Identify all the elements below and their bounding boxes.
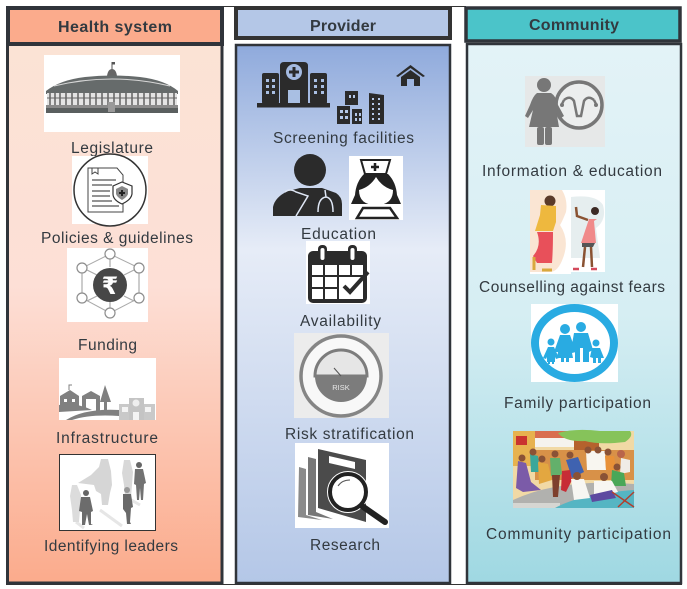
icon: infrastructure [59,358,156,420]
label: research: Research [310,537,380,554]
heading: provider [236,8,450,38]
heading: health system: Health system [58,19,172,36]
panel: community [466,8,681,583]
label: funding: Funding [78,337,137,354]
icon: doctor [273,154,342,216]
icon: parliament building [44,55,180,132]
heading: community: Community [529,17,619,34]
label: legislature: Legislature [71,140,153,157]
icon: counselling figures [530,190,605,274]
icon: rupee network [67,248,148,322]
heading: health system [8,8,222,44]
label: counselling against fears: Counselling against fears [479,279,665,296]
icon: identifying leaders [60,454,156,530]
icon: policy document [72,154,148,226]
icon: calendar [306,241,370,304]
label: community participation: Community participation [486,526,671,543]
icon: family in ring [531,304,618,382]
panel: provider [236,8,450,583]
icon: nurse [349,156,403,220]
label: education: Education [301,226,376,243]
illustration: community gathering [513,430,634,508]
label: information and education: Information & education [482,163,662,180]
label: family participation: Family participation [504,395,651,412]
icon: screening facilities [257,62,425,124]
label: risk stratification: Risk stratification [285,426,414,443]
icon: rupee network: ₹ [102,272,118,300]
label: screening facilities: Screening facilities [273,130,414,147]
heading: community [466,8,680,41]
panel: health system [8,8,222,583]
heading: provider: Provider [310,18,376,35]
label: identifying leaders: Identifying leaders [44,538,178,555]
icon: research folder and magnifier [295,443,389,528]
label: policies and guidelines: Policies & guidelines [41,230,193,247]
icon: risk gauge: RISK [332,383,350,392]
label: infrastructure: Infrastructure [56,430,158,447]
icon: risk gauge [294,333,389,418]
label: availability: Availability [300,313,381,330]
icon: woman and uterus [525,76,605,147]
